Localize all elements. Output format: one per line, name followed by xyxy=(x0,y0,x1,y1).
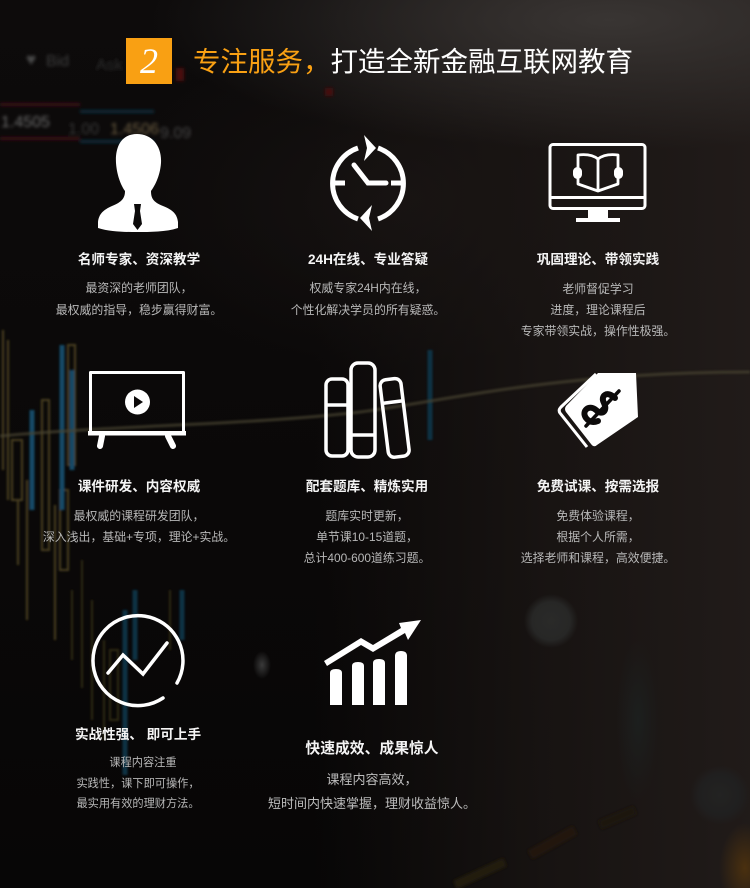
icon: three books xyxy=(324,361,411,459)
background: blurred trading chart photo: 1.4505 xyxy=(1,114,50,131)
description: 进度，理论课程后 xyxy=(550,303,646,317)
description xyxy=(76,756,200,810)
description: 课程内容注重 xyxy=(109,757,177,769)
description: 课程内容高效， xyxy=(326,772,418,787)
background: blurred trading chart photo: Ask xyxy=(96,57,124,74)
heading: 快速成效、成果惊人 xyxy=(305,741,439,757)
description: 个性化解决学员的所有疑惑。 xyxy=(291,302,445,316)
panel: 快速成效 xyxy=(268,620,476,811)
description: 深入浅出，基础+专项，理论+实战。 xyxy=(43,530,235,544)
description xyxy=(56,281,222,316)
description xyxy=(304,509,430,565)
description: 题库实时更新， xyxy=(325,509,409,523)
heading: 免费试课、按需选报 xyxy=(537,479,659,494)
background: blurred trading chart photo: 9.09 xyxy=(160,125,191,142)
heading: 名师专家、资深教学 xyxy=(78,252,200,267)
icon: circle with zigzag line xyxy=(91,614,185,708)
heading: 配套题库、精炼实用 xyxy=(306,479,428,494)
icon: rising bars with arrow xyxy=(324,620,421,705)
description xyxy=(268,772,476,811)
description: 最实用有效的理财方法。 xyxy=(76,798,200,810)
panel: 配套题库 xyxy=(304,361,430,565)
heading: 24H在线、专业答疑 xyxy=(308,252,428,267)
description: 选择老师和课程，高效便捷。 xyxy=(521,551,675,565)
background: blurred trading chart photo: Bid xyxy=(46,53,69,70)
panel: 24H在线 xyxy=(291,135,445,316)
panel: 名师专家 xyxy=(56,134,222,316)
heading: 课件研发、内容权威 xyxy=(78,479,200,494)
description: 单节课10-15道题， xyxy=(316,530,418,544)
number badge: 2 xyxy=(140,41,158,81)
icon: video screen xyxy=(88,371,186,449)
description: 最权威的指导，稳步赢得财富。 xyxy=(56,302,222,316)
icon: monitor with open book xyxy=(548,143,646,222)
description: 权威专家24H内在线， xyxy=(310,281,426,295)
heading: 巩固理论、带领实践 xyxy=(537,252,659,267)
description xyxy=(521,282,675,338)
icon: person with tie xyxy=(98,134,178,232)
background: blurred trading chart photo: ♥ xyxy=(26,50,36,69)
description xyxy=(291,281,445,316)
description xyxy=(43,509,235,544)
description: 老师督促学习 xyxy=(562,282,634,296)
icon: dollar price tag xyxy=(558,372,638,448)
decorative candlesticks xyxy=(3,330,430,775)
panel: 实战性强 xyxy=(75,614,201,810)
number badge xyxy=(126,38,172,84)
background: blurred trading chart photo: 1.4506 xyxy=(110,121,159,138)
description: 短时间内快速掌握，理财收益惊人。 xyxy=(268,796,476,811)
description: 最权威的课程研发团队， xyxy=(74,509,204,523)
description: 专家带领实战，操作性极强。 xyxy=(521,324,675,338)
heading: 实战性强、 即可上手 xyxy=(75,727,201,742)
description: 总计400-600道练习题。 xyxy=(304,551,430,565)
panel: 免费试课 xyxy=(521,372,675,565)
background: blurred trading chart photo: 1.00 xyxy=(68,121,99,138)
title banner xyxy=(126,38,633,84)
icon: clock with circular arrows xyxy=(330,135,406,231)
description: 根据个人所需， xyxy=(556,530,640,544)
description: 免费体验课程， xyxy=(556,509,640,523)
panel: 巩固理论 xyxy=(521,143,675,338)
panel: 课件研发 xyxy=(43,371,235,544)
description: 实践性，课下即可操作， xyxy=(76,778,200,790)
description: 最资深的老师团队， xyxy=(85,281,193,295)
description xyxy=(521,509,675,565)
heading text: 专注服务，打造全新金融互联网教育 xyxy=(193,46,633,77)
